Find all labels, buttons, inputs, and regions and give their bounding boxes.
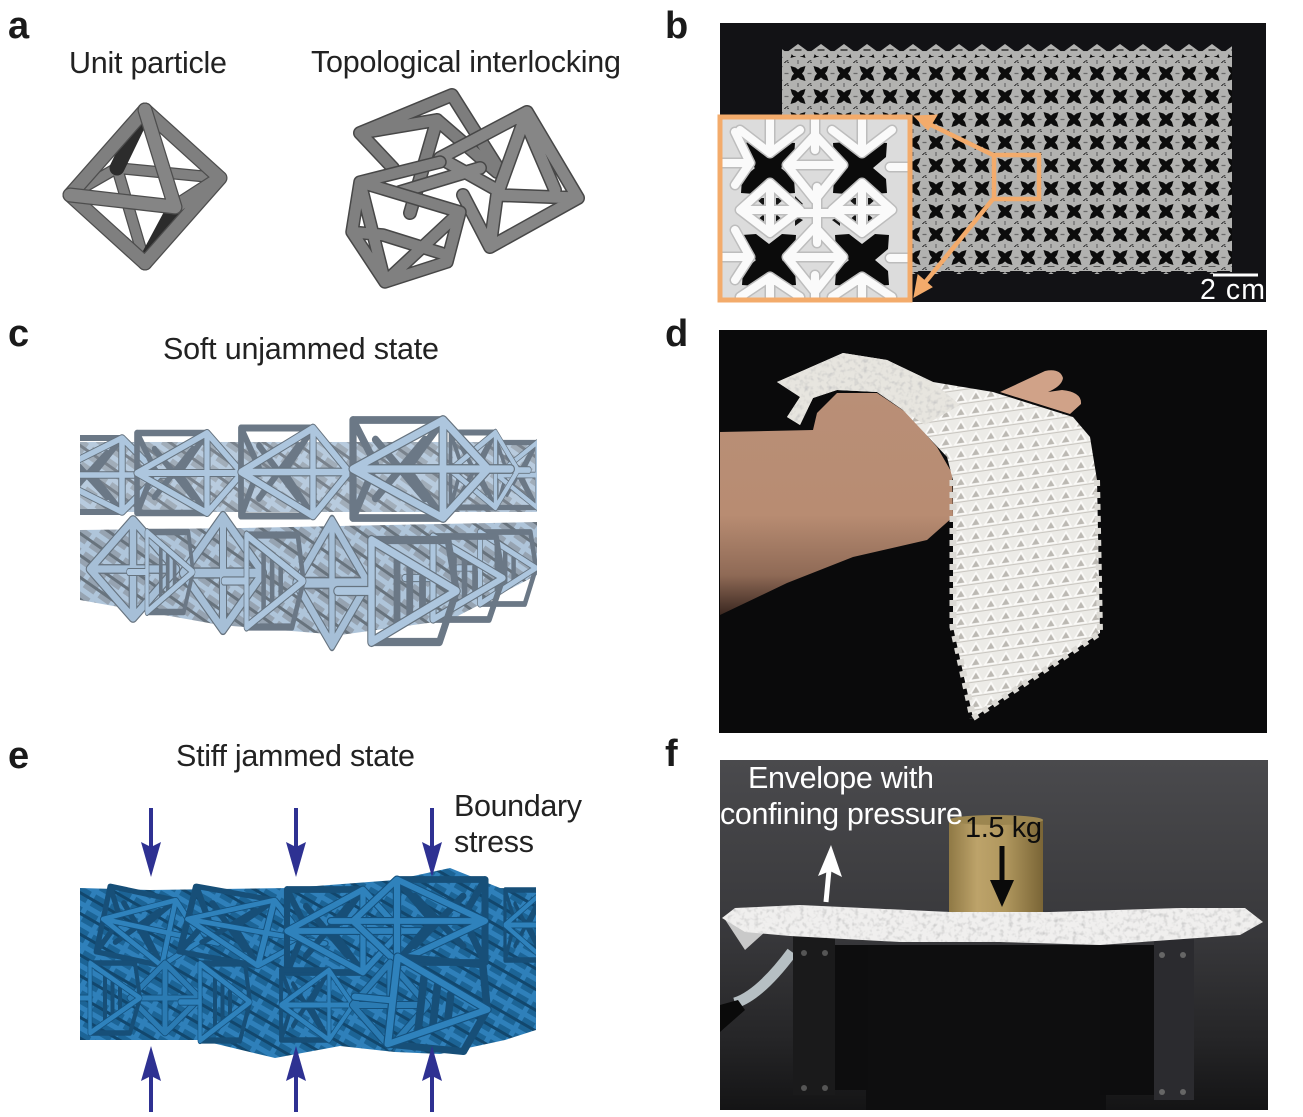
arrows: top boundary stress [141,808,442,877]
white sheet in envelope [722,905,1263,950]
brass weight [949,815,1043,912]
scale bar: 2 cm [1200,274,1265,306]
arrow: zoom to inset top [914,115,993,155]
icon: octahedral unit particle [70,110,220,263]
label: envelope with confining pressure: confining pressure [720,797,963,831]
vacuum tube [720,952,792,1032]
panel letter c: c [8,313,29,355]
hand and forearm [720,370,1081,615]
photo background [719,330,1267,733]
photo background [720,23,1266,302]
panel letter d: d [665,313,688,355]
heading: topological interlocking: Topological interlocking [311,45,621,79]
dark shadow under sheet [866,945,1106,1110]
3D particle assembly, unjammed [48,420,567,645]
panel a: unit particle and interlocking [8,5,621,282]
white interlocked sheet [777,353,1100,718]
panel b: photo of printed sheet with inset [665,5,1266,306]
panel letter e: e [8,735,29,777]
panel letter a: a [8,5,30,47]
arrow: white to envelope [818,845,842,902]
orange zoom square [994,155,1039,199]
icon: three interlocked particles [352,95,578,282]
left support block [793,935,868,1095]
label: envelope with confining pressure: Envelope with [748,761,934,795]
label: envelope with confining pressure [720,761,963,831]
heading: unit particle: Unit particle [69,46,227,80]
label: weight: 1.5 kg [965,812,1042,844]
arrow: black load [990,846,1014,907]
arrows: bottom boundary stress [141,1046,442,1112]
heading: soft unjammed state: Soft unjammed state [163,332,439,366]
label: boundary stress: stress [454,825,534,859]
photo background [720,760,1268,1110]
right support block [1100,938,1194,1100]
panel e: stiff jammed state [8,735,583,1112]
panel f: load-bearing photo [665,733,1268,1110]
heading: stiff jammed state: Stiff jammed state [176,739,415,773]
inset zoom photo [720,117,910,300]
panel c: soft unjammed state [8,313,567,645]
label: boundary stress [454,789,583,859]
lattice sheet [782,44,1232,274]
panel letter f: f [665,733,678,775]
label: boundary stress: Boundary [454,789,583,823]
arrow: zoom to inset bottom [914,199,993,297]
panel letter b: b [665,5,688,47]
panel d: sheet draped over hand [665,313,1267,733]
3D particle assembly, jammed [70,868,575,1058]
